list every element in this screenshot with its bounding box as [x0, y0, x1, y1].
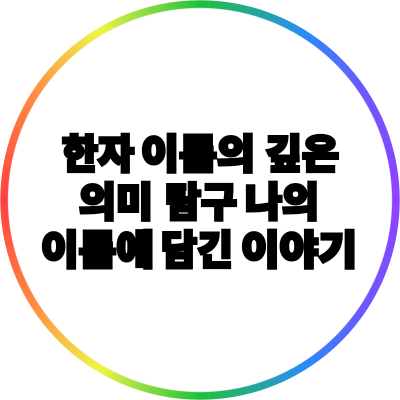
title: 깊은 [265, 133, 339, 177]
title: 탐구 [165, 181, 237, 225]
title: 담긴 [161, 229, 233, 273]
title: 이야기 [241, 229, 357, 273]
title: 의미 [79, 181, 153, 225]
title: 한자 [62, 133, 134, 177]
title: 나의 [245, 181, 319, 225]
title: 이름에 [41, 229, 154, 273]
title: 이름의 [141, 133, 255, 177]
